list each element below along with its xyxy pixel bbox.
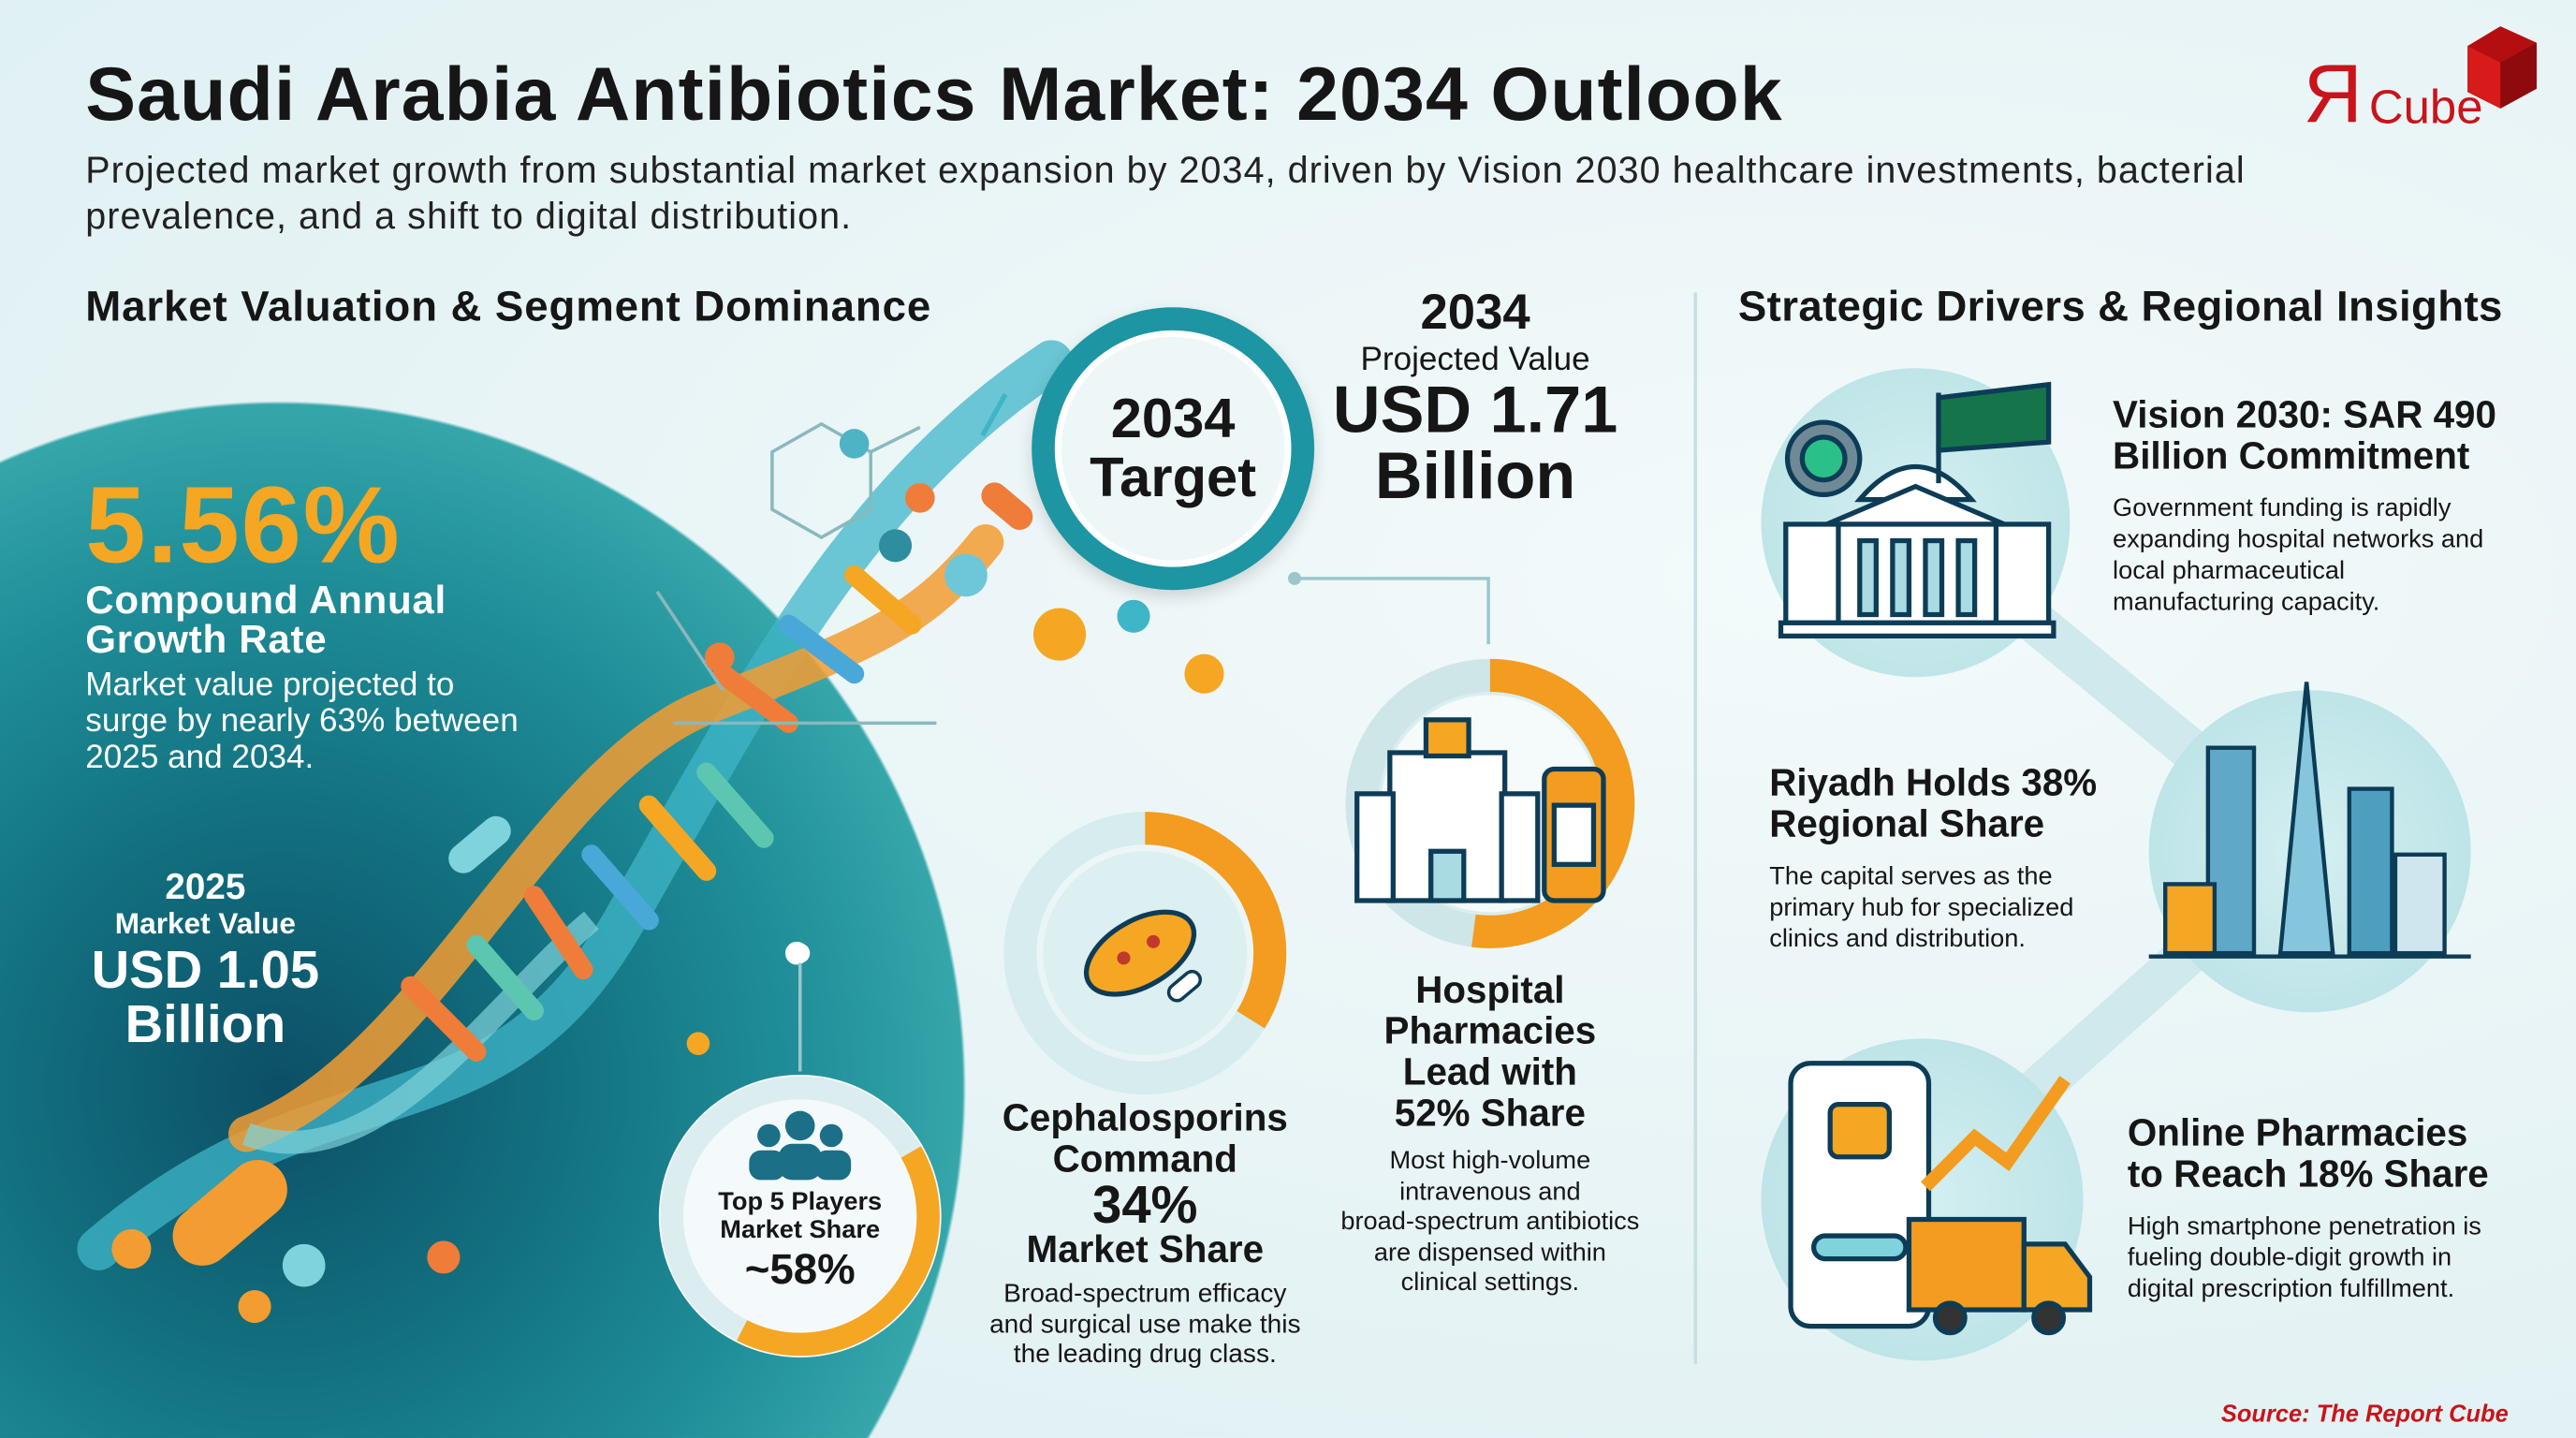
text: hospital pharmacies: 52% Share: [1395, 1092, 1586, 1134]
icon: hospital: [1357, 720, 1603, 901]
text: riyadh: Regional Share: [1769, 802, 2044, 844]
2025 market value: [92, 866, 319, 1053]
logo: Cube: [2369, 82, 2483, 135]
text: riyadh: clinics and distribution.: [1769, 925, 2026, 953]
text: cephalosporins: 34%: [1092, 1175, 1197, 1234]
2034 target circle: [1032, 307, 1314, 590]
2034 target circle: Target: [1090, 447, 1256, 509]
CAGR block: Compound Annual: [85, 579, 446, 623]
text: hospital pharmacies: Pharmacies: [1384, 1009, 1596, 1051]
text: hospital pharmacies: clinical settings.: [1401, 1269, 1579, 1297]
CAGR block: 2025 and 2034.: [85, 740, 314, 776]
text: riyadh: primary hub for specialized: [1769, 894, 2073, 922]
text: vision 2030: manufacturing capacity.: [2113, 588, 2379, 616]
source: Source: The Report Cube: [2221, 1401, 2509, 1428]
text: online pharmacies: digital prescription fulfillment.: [2128, 1275, 2454, 1303]
background teal circle: [0, 398, 973, 1438]
text: online pharmacies: fueling double-digit growth in: [2128, 1244, 2452, 1272]
text: cephalosporins: Command: [1053, 1137, 1237, 1180]
2034 projected value: USD 1.71: [1333, 374, 1617, 447]
text: riyadh: Riyadh Holds 38%: [1769, 761, 2097, 803]
donut: hospital pharmacies 52%: [1346, 659, 1634, 948]
icon: government building: [1761, 368, 2070, 677]
logo: R: [2304, 48, 2363, 139]
2034 target circle: 2034: [1111, 388, 1236, 450]
donut: top 5 players: Top 5 Players: [718, 1188, 882, 1216]
donut: top 5 players: ~58%: [745, 1244, 856, 1293]
text: vision 2030: local pharmaceutical: [2113, 557, 2345, 585]
icon: riyadh skyline: [2149, 690, 2471, 1012]
text: online pharmacies: to Reach 18% Share: [2128, 1152, 2489, 1195]
text: cephalosporins: [989, 1096, 1301, 1369]
2034 projected value: Projected Value: [1360, 342, 1590, 378]
CAGR block: Market value projected to: [85, 668, 454, 703]
2034 projected value: 2034: [1421, 286, 1530, 340]
text: cephalosporins: and surgical use make this: [989, 1311, 1301, 1339]
title: Saudi Arabia Antibiotics Market: 2034 Outlook: [85, 51, 1783, 137]
text: online pharmacies: Online Pharmacies: [2128, 1111, 2467, 1153]
2025 market value: Market Value: [115, 907, 296, 940]
subtitle: Projected market growth from substantial market expansion by 2034, driven by Vision 2030 healthcare investments, bacterial: [85, 150, 2246, 191]
icon: bacterium: [1073, 895, 1208, 1011]
text: hospital pharmacies: intravenous and: [1399, 1178, 1581, 1206]
2025 market value: 2025: [165, 866, 245, 907]
text: cephalosporins: the leading drug class.: [1014, 1341, 1277, 1369]
text: hospital pharmacies: Most high-volume: [1390, 1147, 1590, 1175]
text: hospital pharmacies: Hospital: [1415, 968, 1564, 1011]
text: hospital pharmacies: [1340, 968, 1639, 1297]
text: hospital pharmacies: are dispensed within: [1374, 1239, 1606, 1267]
CAGR block: surge by nearly 63% between: [85, 703, 519, 740]
2034 projected value: Billion: [1375, 440, 1575, 513]
donut: cephalosporins 34%: [1003, 812, 1286, 1094]
text: cephalosporins: Market Share: [1027, 1227, 1264, 1270]
text: vision 2030: Government funding is rapidly: [2113, 494, 2451, 522]
section heading: left: Market Valuation & Segment Dominance: [85, 281, 931, 330]
CAGR block: [85, 463, 519, 776]
CAGR block: 5.56%: [85, 463, 401, 585]
text: online pharmacies: [2128, 1111, 2489, 1303]
text: cephalosporins: Broad-spectrum efficacy: [1003, 1280, 1286, 1308]
section heading: right: Strategic Drivers & Regional Insights: [1738, 281, 2503, 330]
text: online pharmacies: High smartphone penetration is: [2128, 1212, 2481, 1240]
text: riyadh: [1769, 761, 2097, 953]
2025 market value: Billion: [125, 994, 285, 1053]
text: riyadh: The capital serves as the: [1769, 863, 2053, 890]
text: hospital pharmacies: Lead with: [1403, 1050, 1577, 1093]
logo: [2304, 26, 2537, 139]
divider: [1694, 292, 1697, 1364]
donut: top 5 players: [659, 1075, 942, 1357]
subtitle: [85, 150, 2246, 237]
CAGR block: Growth Rate: [85, 618, 327, 662]
icon: online pharmacy: [1761, 1038, 2083, 1360]
text: vision 2030: [2113, 393, 2496, 616]
subtitle: prevalence, and a shift to digital distribution.: [85, 196, 852, 237]
icon: people: [749, 1111, 851, 1180]
2025 market value: USD 1.05: [92, 940, 319, 999]
text: cephalosporins: Cephalosporins: [1003, 1096, 1288, 1138]
text: vision 2030: Billion Commitment: [2113, 433, 2469, 477]
text: vision 2030: Vision 2030: SAR 490: [2113, 393, 2496, 435]
2034 projected value: [1333, 286, 1617, 513]
donut: top 5 players: Market Share: [720, 1216, 880, 1244]
text: hospital pharmacies: broad-spectrum antibiotics: [1340, 1208, 1639, 1236]
text: vision 2030: expanding hospital networks and: [2113, 526, 2483, 554]
